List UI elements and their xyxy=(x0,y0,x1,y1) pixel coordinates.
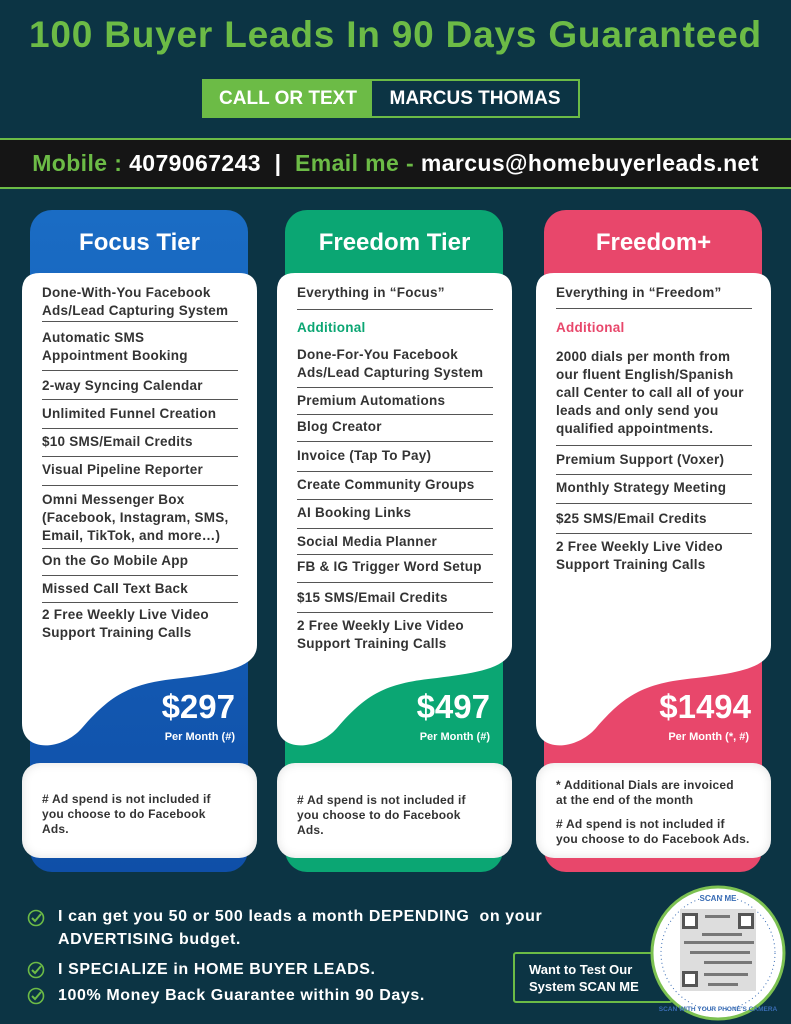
icon: check xyxy=(28,910,44,926)
panel: Focus Tier: On the Go Mobile App xyxy=(42,553,188,568)
note: # Ad spend is not included if xyxy=(42,792,211,806)
panel: Freedom Tier: Support Training Calls xyxy=(297,636,447,651)
panel: Focus Tier: Ads/Lead Capturing System xyxy=(42,303,228,318)
panel: Freedom Tier: 2 Free Weekly Live Video xyxy=(297,618,464,633)
heading: Freedom Tier: Freedom Tier xyxy=(319,229,470,256)
panel: Focus Tier: (Facebook, Instagram, SMS, xyxy=(42,510,229,525)
note xyxy=(277,763,512,858)
contact band xyxy=(0,138,791,189)
panel: Focus Tier: Done-With-You Facebook xyxy=(42,285,211,300)
price: $497 xyxy=(417,688,490,725)
panel: Focus Tier: Omni Messenger Box xyxy=(42,492,185,507)
panel: Focus Tier: Automatic SMS xyxy=(42,330,144,345)
panel: Freedom Tier: Everything in “Focus” xyxy=(297,285,445,300)
heading: Focus Tier: Focus Tier xyxy=(79,229,200,256)
callout: scan me: Want to Test Our xyxy=(529,962,632,977)
panel: Freedom+: our fluent English/Spanish xyxy=(556,367,734,382)
price: $1494 xyxy=(659,688,751,725)
icon: QR code xyxy=(650,886,786,1020)
bullet list: I can get you 50 or 500 leads a month DEPENDING on your xyxy=(58,908,542,925)
feature list xyxy=(42,285,238,640)
note: you choose to do Facebook xyxy=(297,808,461,822)
note: # Ad spend is not included if xyxy=(297,793,466,807)
panel: Focus Tier: Email, TikTok, and more…) xyxy=(42,528,220,543)
contact band: Mobile : 4079067243 | Email me - marcus@homebuyerleads.net xyxy=(32,150,759,176)
panel: Freedom Tier: Additional xyxy=(297,320,366,335)
panel: Freedom Tier xyxy=(277,210,512,872)
note: you choose to do Facebook xyxy=(42,807,206,821)
panel: Freedom Tier: Social Media Planner xyxy=(297,534,437,549)
note: * Additional Dials are invoiced xyxy=(556,778,734,792)
note xyxy=(536,763,771,858)
callout: scan me xyxy=(513,952,673,1003)
title: 100 Buyer Leads In 90 Days Guaranteed xyxy=(29,14,762,55)
panel: Freedom+: $25 SMS/Email Credits xyxy=(556,511,707,526)
panel: Focus Tier: Support Training Calls xyxy=(42,625,192,640)
panel: Freedom+: 2000 dials per month from xyxy=(556,349,730,364)
panel: Freedom Tier: Ads/Lead Capturing System xyxy=(297,365,483,380)
bullet list: ADVERTISING budget. xyxy=(58,931,241,948)
panel: Freedom+: call Center to call all of your xyxy=(556,385,744,400)
panel: Focus Tier xyxy=(22,210,257,872)
callout: scan me: System SCAN ME xyxy=(529,979,639,994)
panel: Freedom Tier: AI Booking Links xyxy=(297,505,411,520)
panel: Freedom Tier: Per Month (#) xyxy=(420,731,490,743)
note: you choose to do Facebook Ads. xyxy=(556,832,750,846)
call or text box xyxy=(202,79,580,118)
note: at the end of the month xyxy=(556,793,693,807)
panel: Focus Tier: Missed Call Text Back xyxy=(42,581,188,596)
panel: Freedom+: Premium Support (Voxer) xyxy=(556,452,724,467)
panel: Freedom+: leads and only send you xyxy=(556,403,719,418)
panel: Focus Tier: 2 Free Weekly Live Video xyxy=(42,607,209,622)
panel: Focus Tier: Unlimited Funnel Creation xyxy=(42,406,216,421)
feature list xyxy=(297,285,493,651)
icon: QR code: SCAN WITH YOUR PHONE'S CAMERA xyxy=(659,1006,778,1013)
panel: Freedom Tier: Create Community Groups xyxy=(297,477,475,492)
note: Ads. xyxy=(297,823,324,837)
panel: Freedom+: Per Month (*, #) xyxy=(668,731,749,743)
price: $297 xyxy=(162,688,235,725)
panel: Freedom Tier: Blog Creator xyxy=(297,419,382,434)
note: Ads. xyxy=(42,822,69,836)
note: # Ad spend is not included if xyxy=(556,817,725,831)
panel: Freedom Tier: FB & IG Trigger Word Setup xyxy=(297,559,482,574)
bullet list: 100% Money Back Guarantee within 90 Days. xyxy=(58,987,425,1004)
panel: Freedom+: Additional xyxy=(556,320,624,335)
panel: Freedom+: 2 Free Weekly Live Video xyxy=(556,539,723,554)
panel: Freedom+: Monthly Strategy Meeting xyxy=(556,480,726,495)
panel: Focus Tier: 2-way Syncing Calendar xyxy=(42,378,203,393)
call or text box: MARCUS THOMAS xyxy=(390,88,560,109)
bullet list: I SPECIALIZE in HOME BUYER LEADS. xyxy=(58,961,376,978)
panel: Freedom+ xyxy=(536,210,771,872)
call or text box: CALL OR TEXT xyxy=(219,88,357,109)
panel: Focus Tier: Per Month (#) xyxy=(165,731,235,743)
panel: Freedom Tier: Premium Automations xyxy=(297,393,445,408)
panel: Freedom+: Everything in “Freedom” xyxy=(556,285,722,300)
icon: QR code: SCAN ME xyxy=(700,894,737,903)
panel: Freedom Tier: Invoice (Tap To Pay) xyxy=(297,448,431,463)
panel: Focus Tier: Visual Pipeline Reporter xyxy=(42,462,203,477)
panel: Freedom+: qualified appointments. xyxy=(556,421,713,436)
bullet list xyxy=(28,908,542,1004)
panel: Focus Tier: $10 SMS/Email Credits xyxy=(42,434,193,449)
panel: Freedom Tier: $15 SMS/Email Credits xyxy=(297,590,448,605)
panel: Focus Tier: Appointment Booking xyxy=(42,348,188,363)
heading: Freedom+: Freedom+ xyxy=(596,229,711,256)
note xyxy=(22,763,257,858)
panel: Freedom Tier: Done-For-You Facebook xyxy=(297,347,458,362)
feature list xyxy=(556,285,752,572)
panel: Freedom+: Support Training Calls xyxy=(556,557,706,572)
